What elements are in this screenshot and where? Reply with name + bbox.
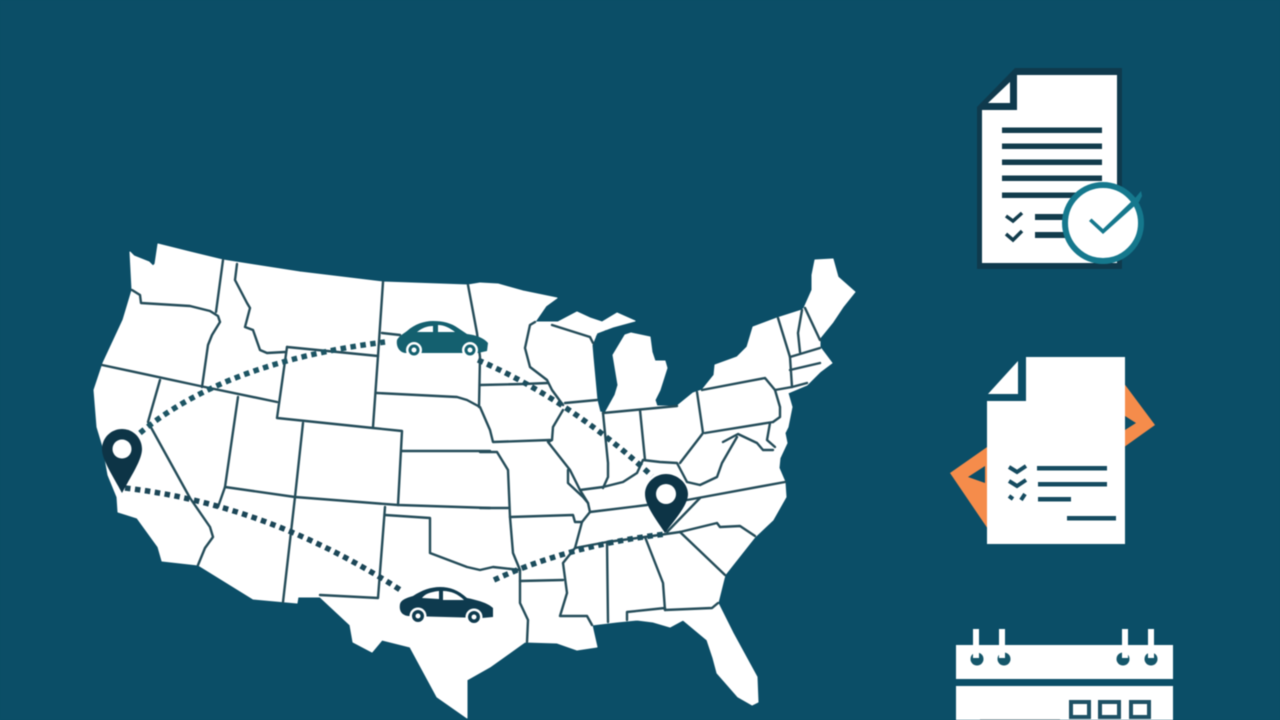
- orange arrow right: [1120, 378, 1155, 450]
- text lines: [1002, 128, 1102, 238]
- icon: checklist document with check badge: [977, 68, 1142, 269]
- icon: document with orange arrows: [950, 357, 1155, 544]
- ring holes: [970, 652, 1158, 666]
- map silhouette: [94, 244, 855, 718]
- orange arrow left: [950, 445, 990, 532]
- folded corner: [988, 82, 1010, 103]
- route: north car to east pin: [478, 360, 652, 476]
- route: south car to east pin: [494, 534, 666, 580]
- text lines: [1037, 466, 1116, 520]
- document page: [977, 68, 1122, 269]
- icon: west location pin: [102, 429, 142, 493]
- icon: calendar: [956, 629, 1173, 720]
- calendar rings: [973, 629, 1154, 658]
- route: west pin to south car: [125, 488, 402, 591]
- icon: south car: [400, 587, 493, 626]
- check marks: [1009, 466, 1026, 500]
- calendar header: [956, 645, 1173, 679]
- Great Lakes bay detail: [596, 330, 612, 412]
- icon: east location pin: [645, 474, 688, 533]
- check marks: [1006, 213, 1022, 240]
- document page: [987, 357, 1125, 544]
- check badge: [1065, 185, 1141, 261]
- route: west pin to north car: [140, 342, 385, 433]
- date cells: [1071, 702, 1149, 717]
- folded corner: [988, 361, 1018, 394]
- state borders: [102, 260, 820, 642]
- icon: north car: [397, 321, 488, 358]
- map: contiguous United States with route: [94, 244, 855, 718]
- faded lower cells: [980, 719, 1060, 720]
- calendar body: [956, 686, 1173, 720]
